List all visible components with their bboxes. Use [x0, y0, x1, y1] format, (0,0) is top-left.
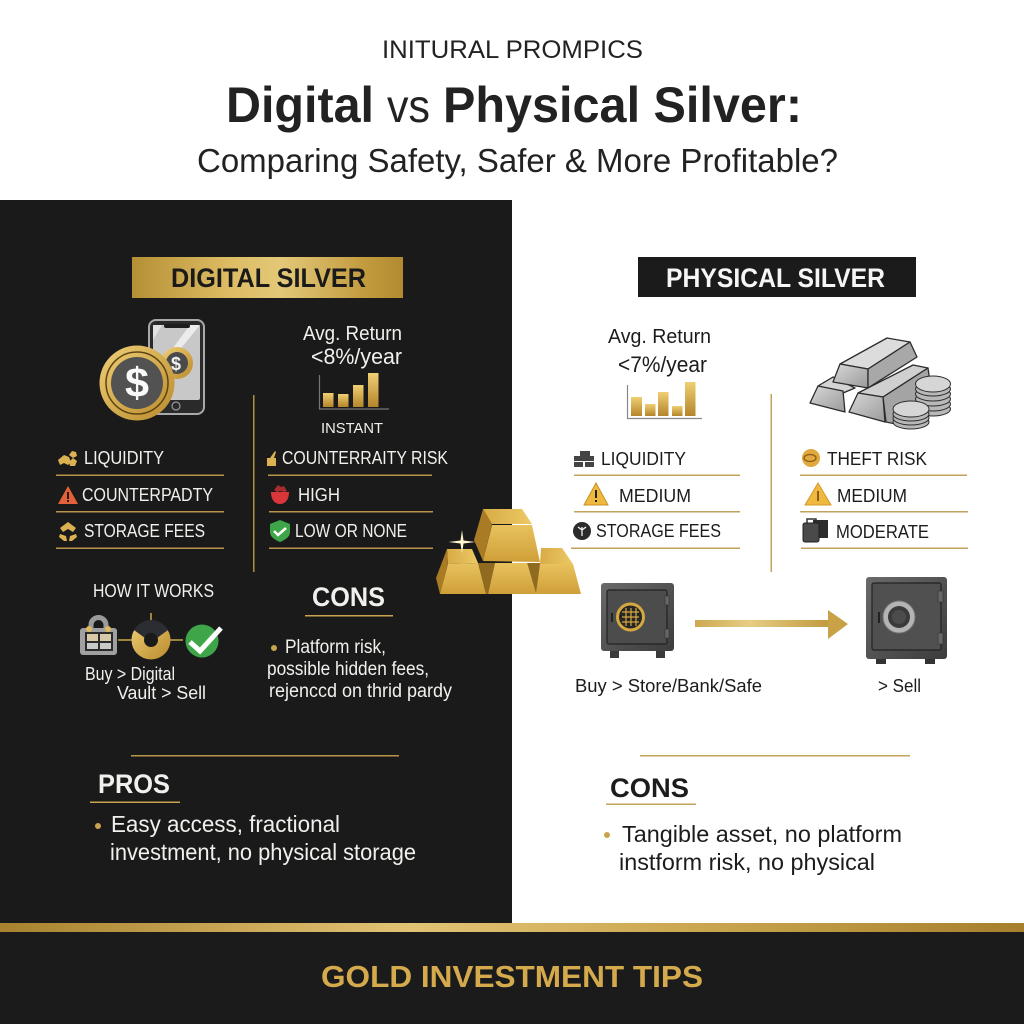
- icon: phone with dollar coins: [100, 320, 204, 420]
- cons bullet text: instform risk, no physical: [619, 849, 875, 875]
- process captions: Buy > Store/Bank/Safe: [575, 676, 762, 696]
- process captions: > Sell: [878, 676, 921, 696]
- icon: phone with dollar coins: $: [171, 354, 181, 374]
- physical silver banner: PHYSICAL SILVER: [666, 263, 885, 293]
- how it works caption: [85, 664, 206, 703]
- row: storage fees: STORAGE FEES: [84, 521, 205, 541]
- main title: Digital: [226, 77, 374, 133]
- panel: header background: [0, 0, 1024, 200]
- icon: phone with dollar coins: $: [125, 359, 149, 406]
- row: moderate: MODERATE: [836, 522, 929, 542]
- row: theft risk: [800, 449, 967, 476]
- icon: safe with dial: [866, 577, 947, 664]
- main title: [226, 77, 802, 133]
- row: counterparty risk: COUNTERRAITY RISK: [282, 448, 448, 468]
- icon: safe with gold keypad: [601, 583, 674, 658]
- how it works caption: Vault > Sell: [117, 683, 206, 703]
- gold strip: [0, 923, 1024, 932]
- average return text: Avg. Return: [608, 326, 711, 348]
- subtitle: Comparing Safety, Safer & More Profitable?: [197, 142, 838, 179]
- left feature rows: [56, 448, 224, 549]
- instant label: INSTANT: [321, 420, 383, 437]
- average return text: Avg. Return: [303, 323, 402, 345]
- icon: connector line: [118, 613, 183, 640]
- row: storage fees: [56, 521, 224, 549]
- divider: [770, 394, 772, 572]
- panel: digital silver: [0, 200, 512, 924]
- right feature rows: [800, 449, 968, 549]
- process captions: [575, 676, 921, 696]
- row: counterparty risk: [267, 448, 448, 476]
- pros heading: PROS: [98, 769, 170, 799]
- row: liquidity: LIQUIDITY: [84, 448, 164, 468]
- right feature rows: [267, 448, 448, 549]
- row: high: [269, 485, 433, 512]
- cons heading: CONS: [312, 582, 385, 612]
- row: low or none: LOW OR NONE: [295, 521, 407, 541]
- main title: vs: [387, 80, 430, 132]
- row: medium: MEDIUM: [837, 486, 907, 506]
- cons bullet text: rejenccd on thrid pardy: [269, 681, 452, 702]
- digital silver banner: [132, 257, 403, 298]
- cons bullet text: [604, 821, 902, 875]
- how it works heading: HOW IT WORKS: [93, 581, 214, 601]
- row: high: HIGH: [298, 485, 340, 505]
- divider: [253, 395, 254, 572]
- bar chart: digital return: [320, 373, 389, 409]
- footer text: GOLD INVESTMENT TIPS: [321, 959, 703, 994]
- divider: [640, 755, 910, 756]
- physical silver banner: [638, 257, 916, 297]
- eyebrow text: INITURAL PROMPICS: [382, 36, 643, 64]
- average return text: [608, 326, 711, 377]
- icon: gold ring: [132, 620, 170, 660]
- row: storage fees: [571, 521, 740, 549]
- row: theft risk: THEFT RISK: [827, 449, 927, 469]
- bar chart: physical return: [628, 382, 702, 418]
- cons heading: CONS: [610, 773, 689, 803]
- panel: footer: [0, 923, 1024, 1024]
- pros bullet text: Easy access, fractional: [111, 811, 340, 837]
- average return text: <7%/year: [618, 352, 707, 377]
- main title: Physical Silver:: [443, 77, 802, 133]
- row: liquidity: LIQUIDITY: [601, 449, 686, 469]
- digital silver banner: DIGITAL SILVER: [171, 263, 366, 293]
- cons bullet text: possible hidden fees,: [267, 659, 429, 680]
- cons bullet text: Platform risk,: [285, 637, 386, 658]
- icon: digital vault lock: [80, 618, 117, 655]
- cons bullet text: [267, 637, 452, 702]
- icon: gold bars: [436, 509, 581, 594]
- row: moderate: [801, 519, 968, 549]
- digital pros: [90, 769, 416, 865]
- row: medium: MEDIUM: [619, 486, 691, 506]
- row: counterparty: [56, 485, 224, 512]
- row: medium: [800, 483, 968, 512]
- row: liquidity: [56, 448, 224, 476]
- pros bullet text: [95, 811, 416, 865]
- cons bullet text: Tangible asset, no platform: [622, 821, 902, 847]
- row: low or none: [269, 520, 433, 549]
- row: medium: [574, 483, 740, 512]
- arrow: [695, 610, 848, 639]
- pros bullet text: investment, no physical storage: [110, 839, 416, 865]
- row: counterparty: COUNTERPADTY: [82, 485, 213, 505]
- how it works: [80, 581, 221, 703]
- divider: [131, 755, 399, 756]
- average return text: <8%/year: [311, 344, 402, 369]
- row: liquidity: [574, 449, 740, 476]
- left feature rows: [571, 449, 740, 549]
- icon: green check: [186, 624, 221, 658]
- average return text: [303, 323, 402, 369]
- row: storage fees: STORAGE FEES: [596, 521, 721, 541]
- heading: header block: [197, 36, 838, 179]
- icon: silver bars and coins: [810, 338, 950, 429]
- physical cons: [604, 773, 902, 875]
- panel: physical silver: [512, 200, 1024, 924]
- how it works caption: Buy > Digital: [85, 664, 175, 684]
- digital cons: [267, 582, 452, 702]
